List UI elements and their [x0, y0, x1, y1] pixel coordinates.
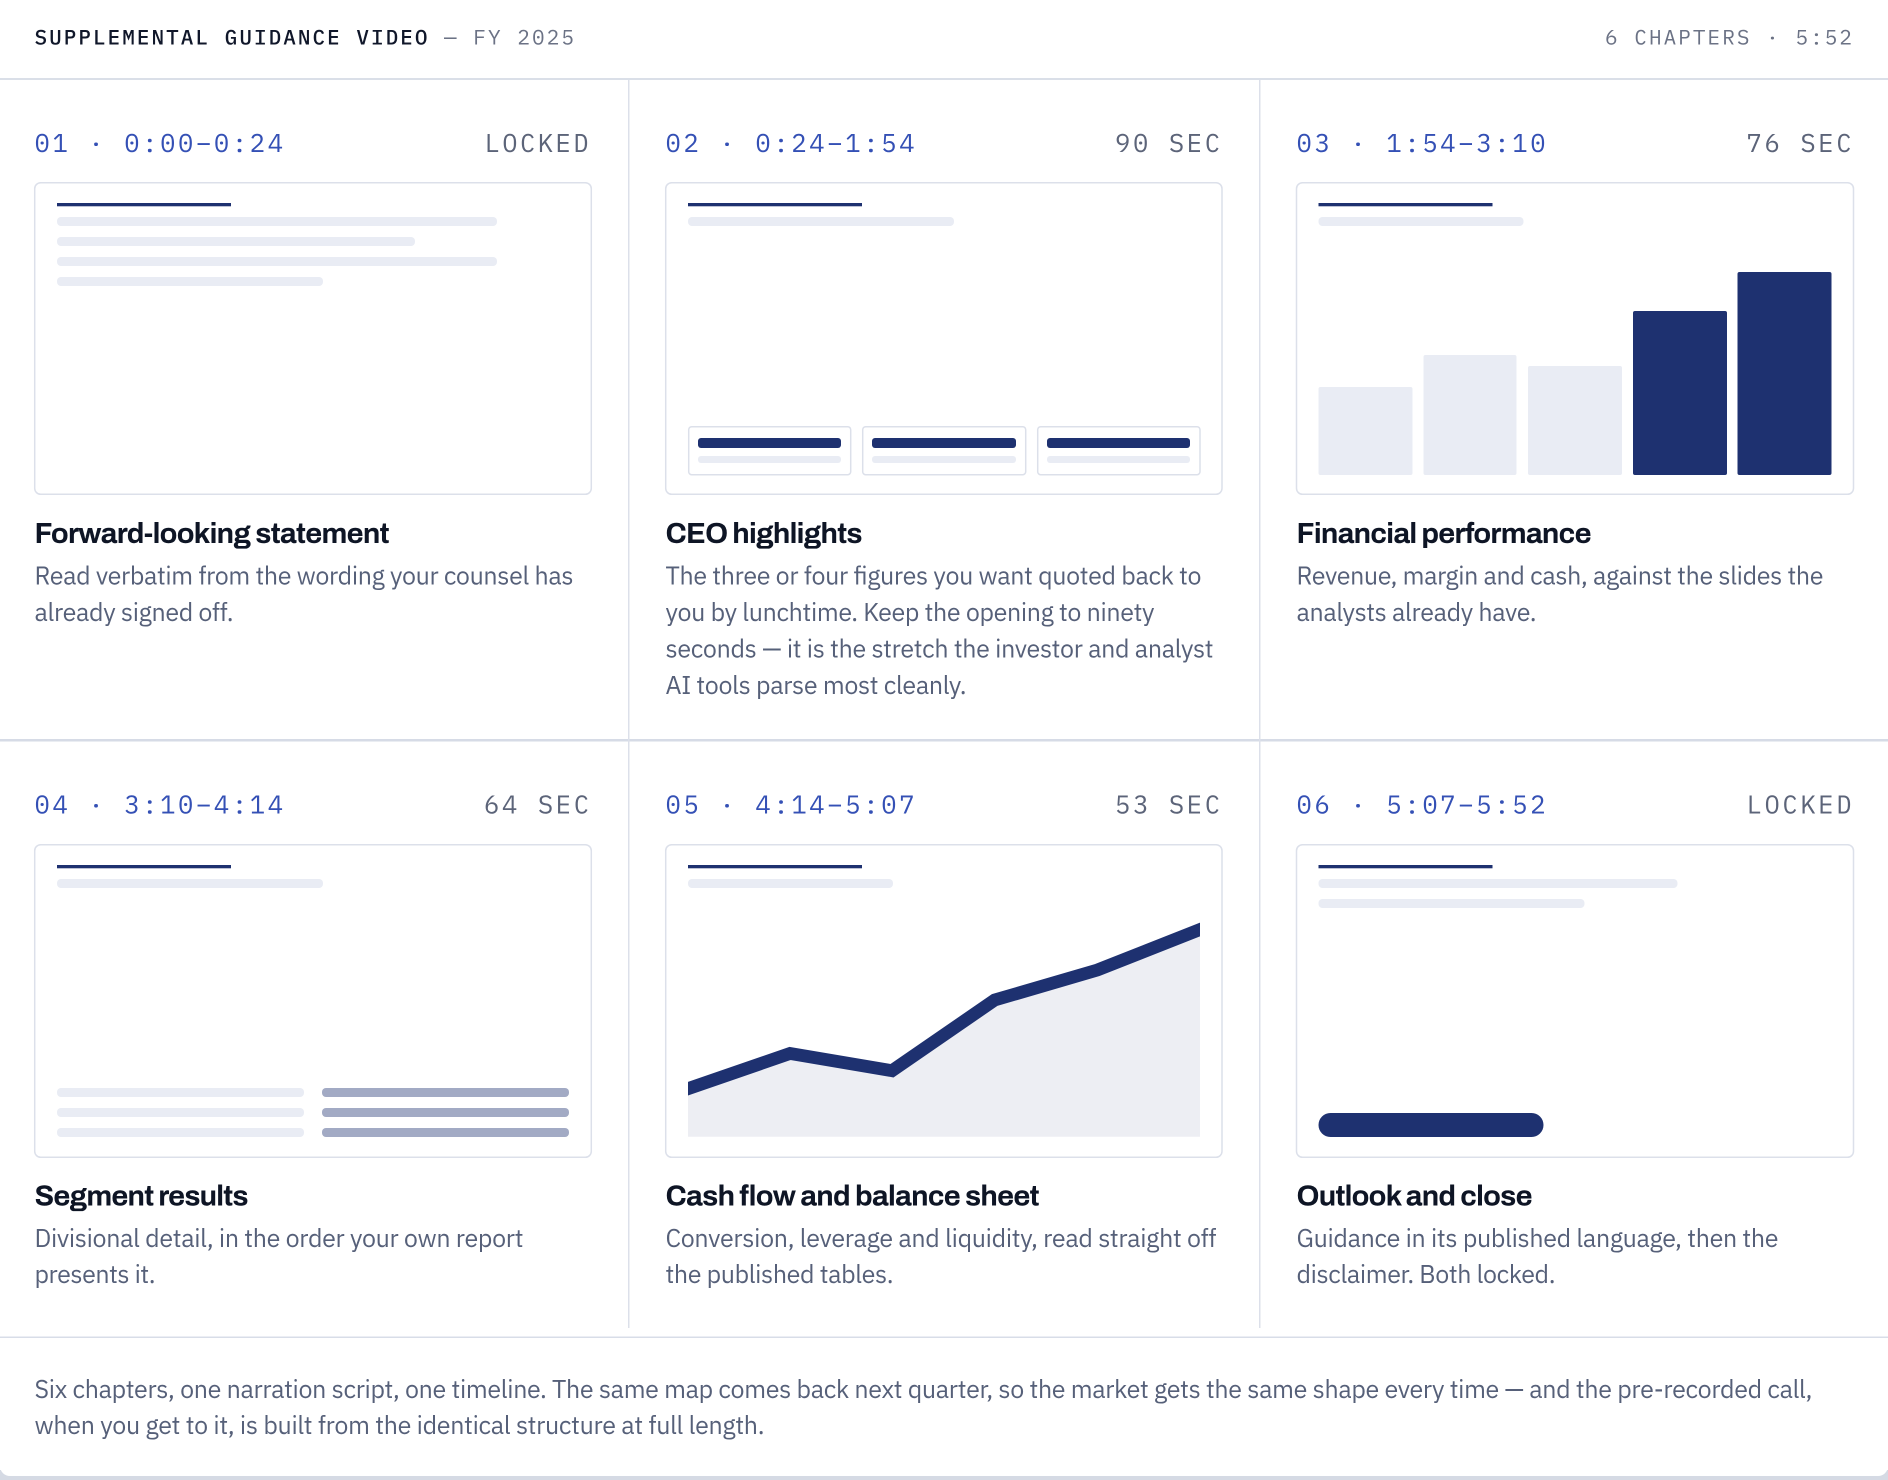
- chapter 02 description: The three or four figures you want quoted back to: [666, 558, 1202, 591]
- chapter 06 duration: LOCKED: [1746, 788, 1852, 822]
- panel: chapter 05: [666, 788, 1222, 1290]
- chapter 06 timecode: 06 · 5:07–5:52: [1296, 788, 1546, 822]
- chapter 06 heading: Outlook and close: [1296, 1182, 1532, 1212]
- chapter 02 heading: CEO highlights: [666, 519, 862, 550]
- chapter 02 description: you by lunchtime. Keep the opening to ninety: [666, 595, 1155, 628]
- panel: chapter 04: [34, 788, 591, 1290]
- chapter 01 heading: Forward-looking statement: [34, 519, 390, 550]
- panel: chapter 02: [666, 127, 1222, 701]
- chapter 05 description: [666, 1221, 1216, 1290]
- chapter 04 timecode: 04 · 3:10–4:14: [34, 788, 283, 822]
- chapter 05 description: Conversion, leverage and liquidity, read straight off: [666, 1221, 1216, 1254]
- chapter 05 timecode: 05 · 4:14–5:07: [666, 788, 914, 822]
- panel: chapter 06: [1296, 788, 1854, 1290]
- chapter 01 description: [34, 558, 574, 628]
- chapter 03 description: [1296, 558, 1824, 628]
- bar chart: [1318, 272, 1832, 475]
- chapter 03 heading: Financial performance: [1296, 519, 1592, 550]
- KPI card 2: [863, 427, 1026, 475]
- header fiscal year: — FY 2025: [444, 22, 574, 50]
- chapter 03 timecode: 03 · 1:54–3:10: [1296, 127, 1546, 160]
- panel: chapter 03: [1296, 127, 1854, 628]
- chapter 04 heading: Segment results: [34, 1182, 248, 1212]
- chapter 03 duration: 76 SEC: [1746, 127, 1852, 160]
- chapter 01 timecode: 01 · 0:00–0:24: [34, 127, 283, 160]
- chapter 03 description: Revenue, margin and cash, against the slides the: [1296, 558, 1824, 591]
- footer note: when you get to it, is built from the identical structure at full length.: [34, 1408, 764, 1441]
- footer note: [34, 1372, 1812, 1441]
- chapter 01 duration: LOCKED: [484, 127, 588, 160]
- chapter 04 description: Divisional detail, in the order your own report: [34, 1221, 524, 1254]
- header title: SUPPLEMENTAL GUIDANCE VIDEO: [34, 22, 428, 50]
- chapter 04 duration: 64 SEC: [484, 788, 589, 822]
- KPI card 3: [1038, 427, 1200, 475]
- chapter 06 slide thumbnail: [1296, 845, 1854, 1157]
- chapter 02 timecode: 02 · 0:24–1:54: [666, 127, 914, 160]
- chapter 04 description: presents it.: [34, 1257, 156, 1290]
- chapter 02 slide thumbnail: [666, 183, 1222, 494]
- chapter 06 description: disclaimer. Both locked.: [1296, 1257, 1556, 1290]
- chapter 06 description: [1296, 1221, 1778, 1290]
- chapter 03 description: analysts already have.: [1296, 595, 1536, 628]
- chapter 05 duration: 53 SEC: [1115, 788, 1220, 822]
- area line chart: [668, 922, 1220, 1137]
- chapter 02 description: seconds — it is the stretch the investor and analyst: [666, 631, 1214, 664]
- chapter 02 description: [666, 558, 1214, 701]
- header bar: [34, 22, 1852, 50]
- chapter 03 slide thumbnail: [1296, 183, 1854, 494]
- panel: chapter 01: [34, 127, 591, 628]
- chapter 02 duration: 90 SEC: [1115, 127, 1220, 160]
- footer note: Six chapters, one narration script, one timeline. The same map comes back next quarter, so the market gets the same shape every time — and the pre-recorded call,: [34, 1372, 1812, 1405]
- chapter 05 slide thumbnail: [666, 845, 1222, 1157]
- chapter 01 description: already signed off.: [34, 595, 234, 628]
- header chapter count: 6 CHAPTERS · 5:52: [1605, 22, 1852, 50]
- chapter 02 description: AI tools parse most cleanly.: [666, 668, 966, 701]
- chapter 05 heading: Cash flow and balance sheet: [666, 1182, 1040, 1212]
- chapter 01 slide thumbnail: [35, 183, 591, 494]
- chapter 04 description: [34, 1221, 524, 1290]
- chapter 01 description: Read verbatim from the wording your counsel has: [34, 558, 574, 591]
- chapter 05 description: the published tables.: [666, 1257, 894, 1290]
- chapter 04 slide thumbnail: [35, 845, 591, 1157]
- chapter 06 description: Guidance in its published language, then the: [1296, 1221, 1778, 1254]
- KPI card 1: [689, 427, 851, 475]
